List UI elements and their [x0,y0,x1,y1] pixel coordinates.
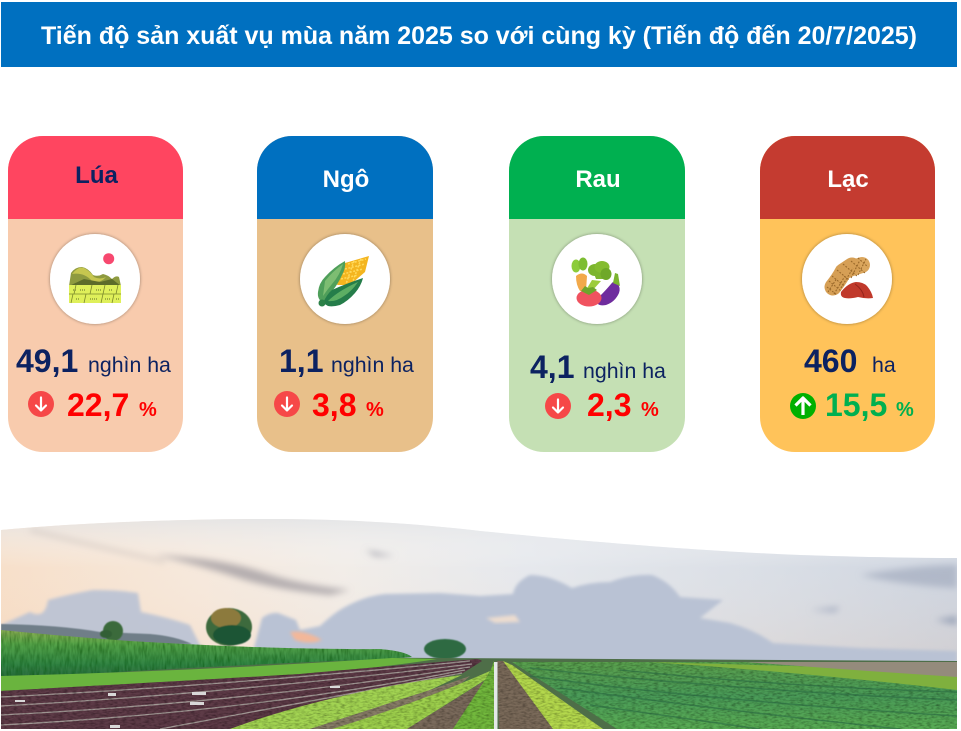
heading: Rau: Rau [575,166,621,193]
icon: down arrow [274,391,300,417]
heading: Lúa: Lúa [75,162,118,189]
value: 4,1 nghìn ha: 4,1 [530,349,574,385]
grass strip [1,658,437,691]
change: 3,8 %: 3,8 [312,387,356,423]
value: 1,1 nghìn ha: 1,1 [279,343,323,379]
panel: Lúa [8,136,183,452]
change: 2,3 %: 2,3 [587,387,631,423]
icon: up arrow [790,393,816,419]
change: 2,3 %: % [641,399,659,421]
icon: corn [300,234,390,324]
icon: rice terraces [50,234,140,324]
heading: Lạc: Lạc [827,166,869,193]
hills [1,623,192,644]
change: 3,8 % [312,387,384,423]
purple lettuce rows [1,659,482,729]
change: 15,5 % [825,387,914,423]
icon: vegetables [552,234,642,324]
lettuce rows and right field [230,661,957,729]
ground base [1,655,957,729]
panel: Rau [509,136,685,452]
value: 460 ha [804,343,896,379]
value: 49,1 nghìn ha [16,343,171,379]
value: 460 ha: 460 [804,343,857,379]
icon: down arrow [28,391,54,417]
panel: Ngô [257,136,433,452]
value: 49,1 nghìn ha: nghìn ha [88,353,171,377]
value: 4,1 nghìn ha: nghìn ha [583,359,666,383]
change: 22,7 % [67,387,157,423]
change: 22,7 %: 22,7 [67,387,129,423]
value: 1,1 nghìn ha [279,343,414,379]
title: Tiến độ sản xuất vụ mùa năm 2025 so với cùng kỳ (Tiến độ đến 20/7/2025) [41,22,917,50]
title banner [1,2,957,67]
value: 460 ha: ha [872,353,896,377]
panel: Lạc [760,136,935,452]
change: 15,5 %: % [896,399,914,421]
icon: peanuts [802,234,892,324]
value: 49,1 nghìn ha: 49,1 [16,343,78,379]
change: 15,5 %: 15,5 [825,387,887,423]
heading: Ngô: Ngô [323,166,369,193]
change: 22,7 %: % [139,399,157,421]
photo: farm fields at sunset [1,515,957,729]
value: 1,1 nghìn ha: nghìn ha [331,353,414,377]
value: 4,1 nghìn ha [530,349,666,385]
icon: down arrow [545,393,571,419]
corn field [1,630,412,677]
change: 3,8 %: % [366,399,384,421]
trees [100,608,466,659]
change: 2,3 % [587,387,659,423]
